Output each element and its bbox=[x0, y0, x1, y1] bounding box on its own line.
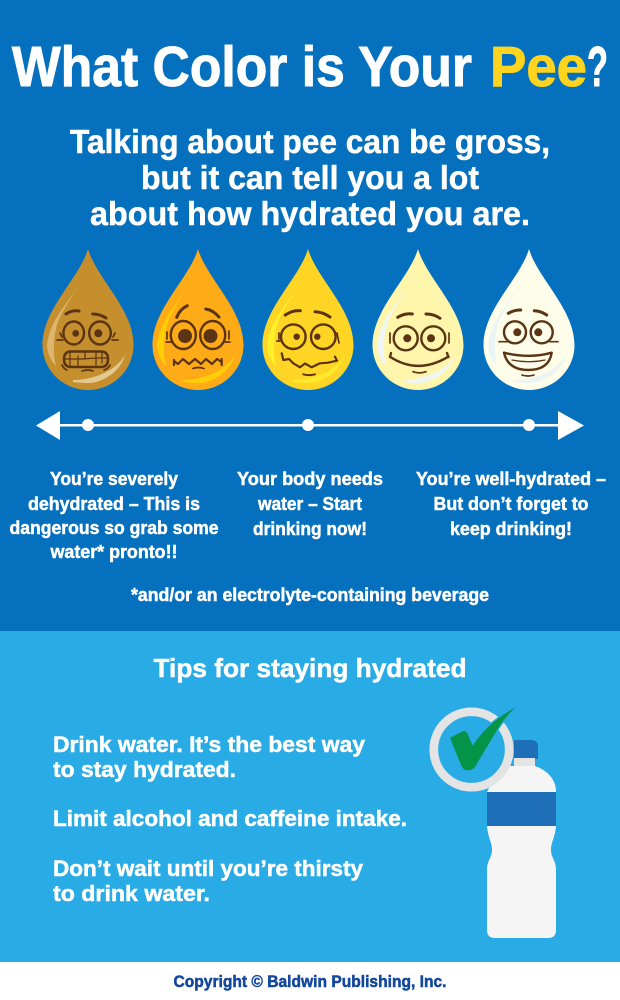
icon: pale yellow drop, well hydrated bbox=[372, 249, 464, 390]
subtitle: but it can tell you a lot bbox=[141, 159, 479, 196]
copyright footer: Copyright © Baldwin Publishing, Inc. bbox=[174, 973, 446, 991]
text: severely dehydrated: You’re severely bbox=[50, 468, 179, 489]
title: Pee bbox=[490, 35, 587, 99]
tips list: Limit alcohol and caffeine intake. bbox=[53, 806, 407, 831]
icon: brown drop, severely dehydrated bbox=[42, 249, 134, 390]
text: severely dehydrated: water* pronto!! bbox=[50, 541, 177, 562]
text: severely dehydrated: dangerous so grab some bbox=[10, 517, 218, 538]
text: body needs water: Your body needs bbox=[237, 468, 383, 489]
text: body needs water bbox=[237, 468, 383, 539]
text: well hydrated: You’re well-hydrated – bbox=[416, 468, 606, 489]
tips list: Drink water. It’s the best way bbox=[53, 732, 366, 757]
footnote: *and/or an electrolyte-containing beverage bbox=[131, 585, 489, 605]
panel: dark blue header background bbox=[0, 0, 620, 631]
tips list bbox=[53, 732, 407, 906]
text: well hydrated: But don’t forget to bbox=[434, 493, 588, 514]
subtitle bbox=[70, 123, 550, 232]
text: severely dehydrated: dehydrated – This is bbox=[28, 493, 200, 514]
text: severely dehydrated bbox=[10, 468, 218, 562]
icon: orange drop, severely dehydrated bbox=[152, 249, 244, 390]
double-headed arrow scale bbox=[36, 411, 584, 440]
icon: water bottle bbox=[487, 740, 556, 938]
title: What Color is Your bbox=[12, 35, 472, 99]
text: well hydrated: keep drinking! bbox=[450, 518, 572, 539]
icon: yellow drop, needs water bbox=[262, 249, 354, 390]
subtitle: about how hydrated you are. bbox=[90, 195, 530, 232]
text: well hydrated bbox=[416, 468, 606, 539]
subtitle: Talking about pee can be gross, bbox=[70, 123, 550, 160]
text: body needs water: drinking now! bbox=[253, 518, 367, 539]
tips list: Don’t wait until you’re thirsty bbox=[53, 856, 364, 881]
icon: check mark in ring bbox=[434, 708, 515, 787]
icon: near-white drop, well hydrated bbox=[484, 249, 574, 390]
panel: light blue tips background bbox=[0, 631, 620, 962]
text: body needs water: water – Start bbox=[257, 493, 362, 514]
tips list: to stay hydrated. bbox=[53, 757, 236, 782]
panel: white footer background bbox=[0, 962, 620, 1000]
tips list: to drink water. bbox=[53, 881, 210, 906]
heading: tips: Tips for staying hydrated bbox=[154, 653, 466, 683]
